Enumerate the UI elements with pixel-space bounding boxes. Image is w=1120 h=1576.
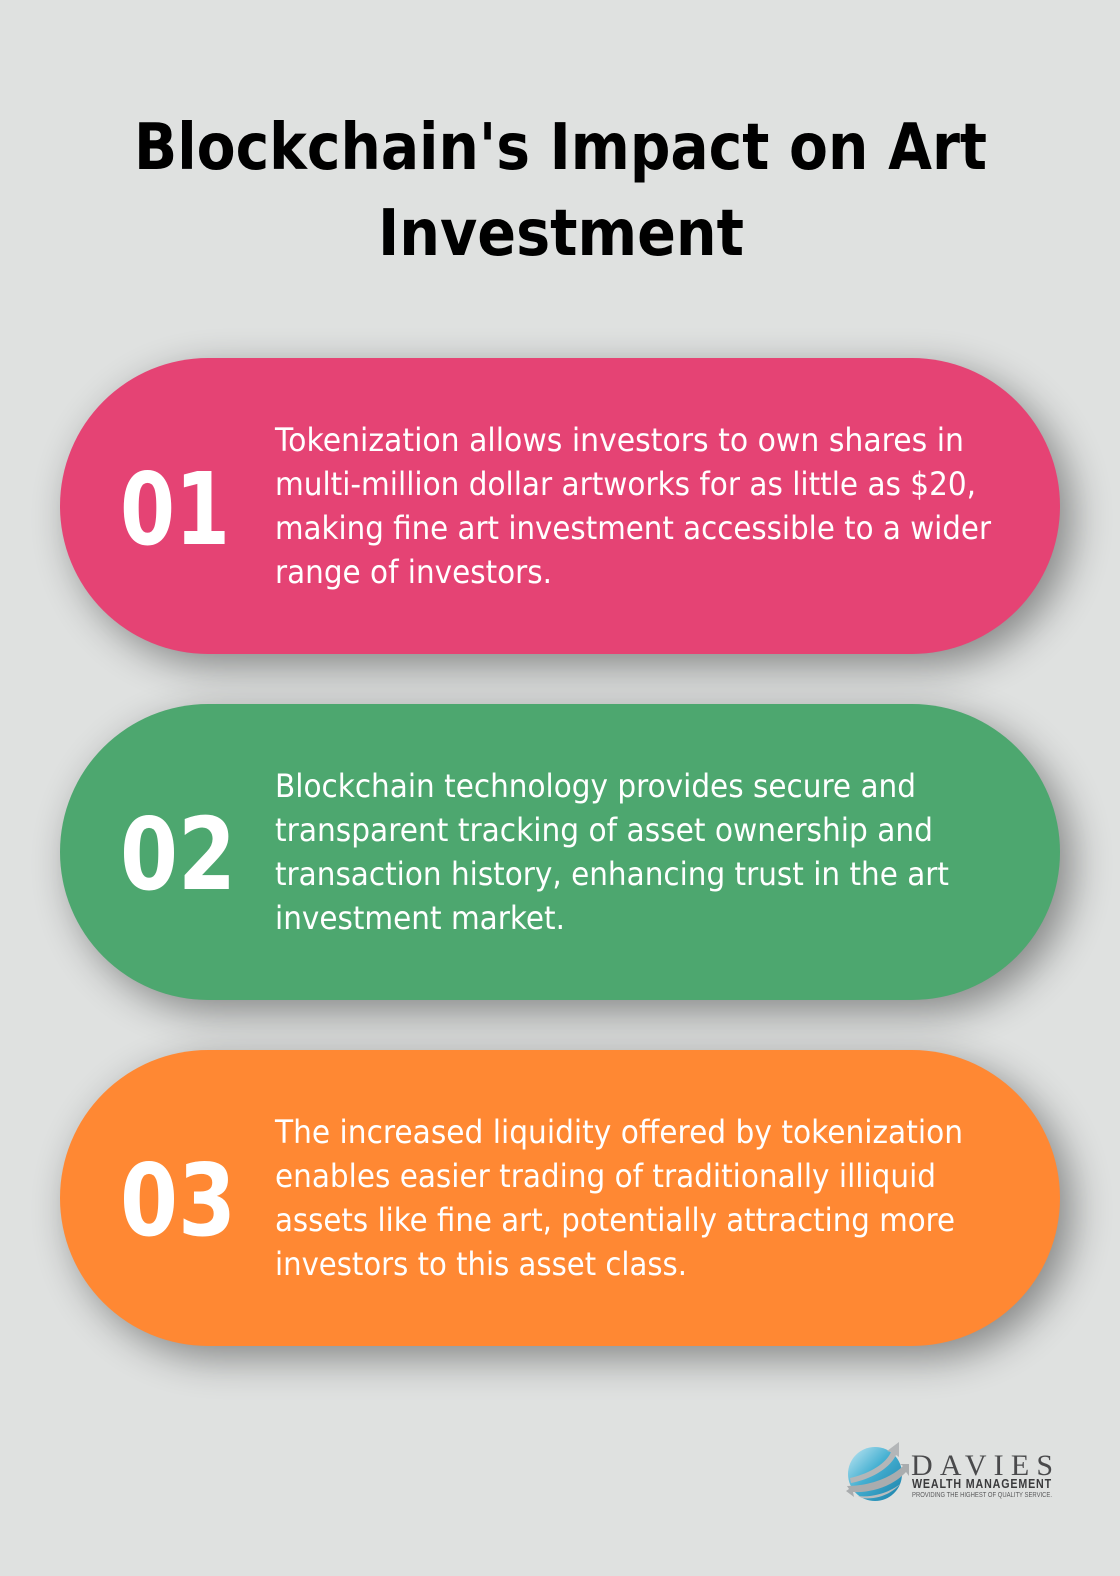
text block: tokenization: multi-million dollar artworks for as little as $20, (275, 467, 976, 503)
text block: tokenization (274, 423, 991, 591)
panel: transparency (60, 704, 1072, 1012)
text block: liquidity: assets like fine art, potentially attracting more (275, 1203, 955, 1239)
panel: liquidity (60, 1050, 1072, 1358)
tagline: PROVIDING THE HIGHEST OF QUALITY SERVICE. (912, 1490, 1052, 1499)
logo: Davies Wealth Management (846, 1442, 1053, 1501)
number 02: 02 (120, 796, 236, 913)
number 03: 03 (120, 1142, 236, 1259)
title: Investment (378, 197, 744, 271)
text block: tokenization: range of investors. (275, 555, 552, 591)
text block: transparency (275, 769, 949, 937)
company line: WEALTH MANAGEMENT (912, 1477, 1052, 1491)
text block: transparency: transaction history, enhancing trust in the art (275, 857, 949, 893)
title (134, 111, 987, 271)
text block: liquidity (274, 1115, 963, 1283)
title: Blockchain's Impact on Art (134, 111, 987, 185)
icon: globe with arrows (846, 1442, 909, 1501)
panel: tokenization (60, 358, 1072, 666)
wordmark: DAVIES (911, 1449, 1053, 1482)
text block: transparency: investment market. (275, 901, 565, 937)
number 01: 01 (120, 451, 230, 568)
text block: tokenization: Tokenization allows investors to own shares in (274, 423, 964, 459)
text block: transparency: transparent tracking of asset ownership and (275, 813, 933, 849)
text block: liquidity: investors to this asset class. (275, 1247, 687, 1283)
text block: liquidity: enables easier trading of traditionally illiquid (275, 1159, 936, 1195)
text block: tokenization: making fine art investment accessible to a wider (275, 511, 991, 547)
text block: liquidity: The increased liquidity offered by tokenization (274, 1115, 963, 1151)
text block: transparency: Blockchain technology provides secure and (275, 769, 916, 805)
